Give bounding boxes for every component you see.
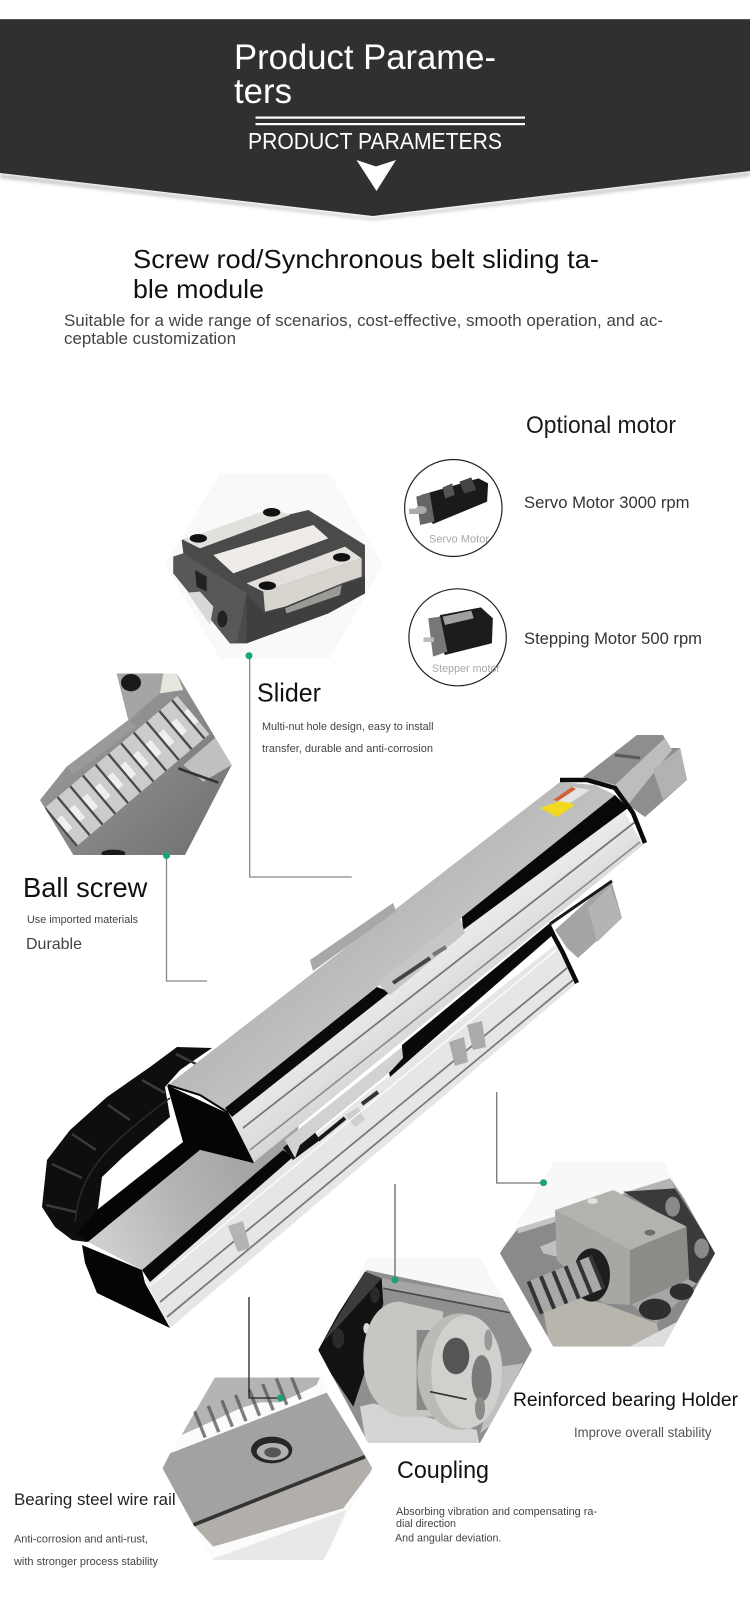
holder callout: Reinforced bearing Holder <box>513 1390 739 1411</box>
slider callout: Slider <box>257 678 321 708</box>
coupling photo <box>318 1270 532 1443</box>
coupling callout: dial direction <box>396 1518 456 1530</box>
coupling callout <box>392 1184 597 1545</box>
heading block <box>64 244 663 348</box>
ball screw callout: Durable <box>26 936 82 953</box>
header banner <box>0 19 750 220</box>
stepper motor label: Stepping Motor 500 rpm <box>524 629 702 648</box>
heading block: ble module <box>133 274 264 304</box>
coupling callout: Absorbing vibration and compensating ra- <box>396 1506 597 1518</box>
upper motor <box>583 735 687 817</box>
upper module <box>168 780 645 1163</box>
heading block: Suitable for a wide range of scenarios, cost-effective, smooth operation, and ac- <box>64 311 663 330</box>
panel: optional motor: Optional motor <box>526 412 676 439</box>
title: ters <box>234 72 292 111</box>
wire rail callout <box>13 1297 284 1568</box>
heading block: Screw rod/Synchronous belt sliding ta- <box>133 244 599 274</box>
heading block: ceptable customization <box>64 329 236 348</box>
lower module <box>82 923 577 1328</box>
double rule <box>256 116 525 125</box>
slider callout: transfer, durable and anti-corrosion <box>262 743 433 755</box>
wire rail photo <box>162 1377 373 1563</box>
stepper motor circle <box>409 589 506 686</box>
lower motor <box>550 881 622 958</box>
panel: ball screw photo <box>40 674 232 855</box>
panel: slider photo <box>165 473 383 658</box>
title: Product Parame- <box>234 38 496 77</box>
slider callout <box>246 652 434 877</box>
subtitle: PRODUCT PARAMETERS <box>248 128 502 154</box>
ball screw callout <box>23 852 207 981</box>
panel: wire rail and coupling photos <box>162 1258 537 1563</box>
drag chain <box>42 1047 253 1242</box>
panel: bearing holder photo <box>500 1178 715 1347</box>
holder callout <box>497 1092 739 1440</box>
servo motor circle <box>405 460 502 556</box>
icon: down arrow <box>356 160 396 191</box>
panel: optional motor <box>405 412 702 686</box>
servo motor circle: Servo Motor <box>429 534 489 546</box>
main product: sliding table module <box>42 735 687 1328</box>
wire rail callout: Anti-corrosion and anti-rust, <box>14 1534 148 1546</box>
wire rail callout: Bearing steel wire rail <box>14 1490 176 1509</box>
coupling callout: And angular deviation. <box>395 1533 501 1545</box>
servo motor label: Servo Motor 3000 rpm <box>524 493 690 512</box>
title <box>234 38 496 111</box>
ball screw callout: Use imported materials <box>27 914 138 926</box>
stepper motor circle: Stepper motor <box>432 663 500 675</box>
coupling callout: Coupling <box>397 1457 489 1484</box>
ball screw callout: Ball screw <box>23 872 148 903</box>
holder callout: Improve overall stability <box>574 1424 712 1440</box>
slider callout: Multi-nut hole design, easy to install <box>262 721 434 733</box>
wire rail callout: with stronger process stability <box>13 1556 158 1568</box>
